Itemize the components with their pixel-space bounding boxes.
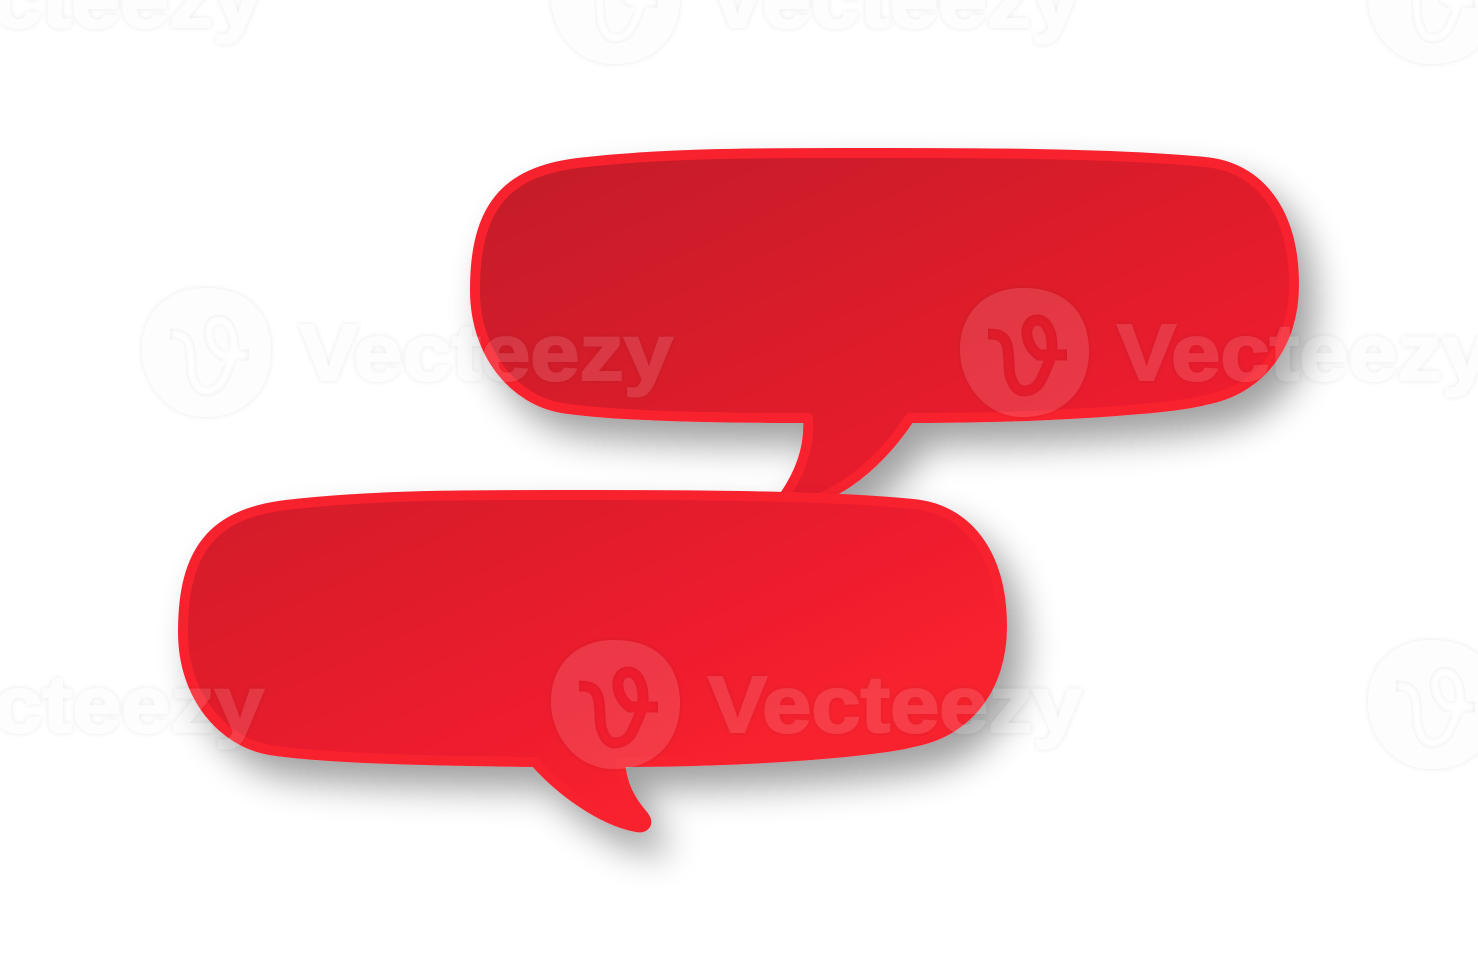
watermark: middle row logo right (960, 288, 1089, 417)
watermark: bottom row text centre: Vecteezy (708, 660, 1083, 749)
watermark: middle row text right: Vecteezy (1117, 308, 1478, 397)
watermark: middle row logo left (142, 288, 271, 417)
watermark: middle row text left: Vecteezy (299, 308, 674, 397)
watermark layer (0, 0, 1478, 769)
watermark: top row logo right (1368, 0, 1478, 64)
watermark: top row logo centre (551, 0, 680, 64)
watermark: bottom row logo centre (551, 640, 680, 769)
upper speech bubble (475, 153, 1294, 503)
lower speech bubble (183, 495, 1002, 827)
watermark: bottom row logo right (1368, 640, 1478, 769)
